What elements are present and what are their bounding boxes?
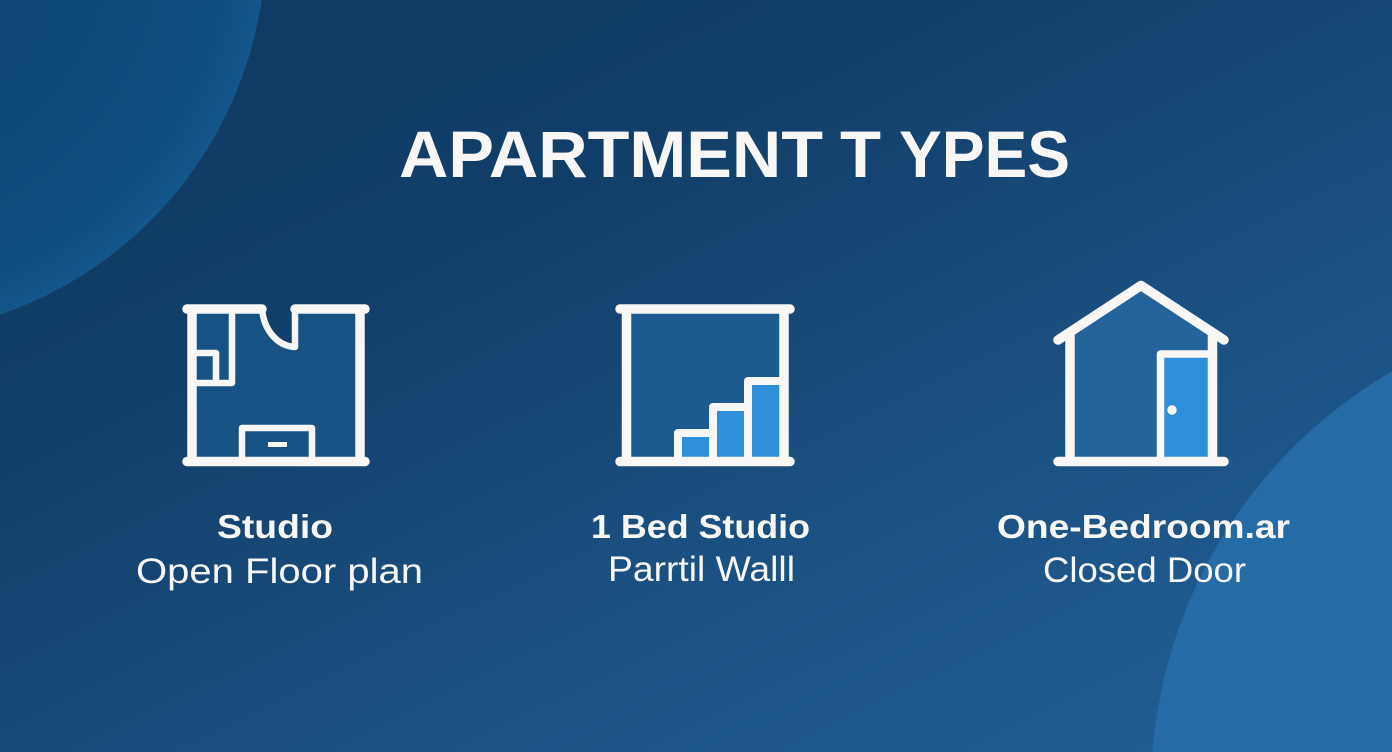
title: T: [840, 117, 881, 191]
panel: one-bedroom: [997, 286, 1290, 590]
icon: partial wall with steps: [620, 309, 790, 462]
text: partial wall: Parrtil Walll: [608, 550, 795, 589]
title: YPES: [899, 117, 1070, 191]
heading: studio: Studio: [217, 508, 333, 545]
heading: 1 bed studio: 1 Bed Studio: [591, 508, 810, 545]
text: closed door: Closed Door: [1043, 551, 1246, 590]
panel: 1 bed studio: [591, 309, 810, 589]
heading: one-bedroom: One-Bedroom.ar: [997, 508, 1290, 545]
icon: studio floor plan: [187, 305, 365, 462]
title: APARTMENT: [399, 117, 823, 191]
panel: studio: [136, 305, 423, 591]
title: [399, 117, 1070, 191]
icon: house with closed door: [1058, 286, 1224, 462]
text: open floor plan: Open Floor plan: [136, 552, 423, 591]
